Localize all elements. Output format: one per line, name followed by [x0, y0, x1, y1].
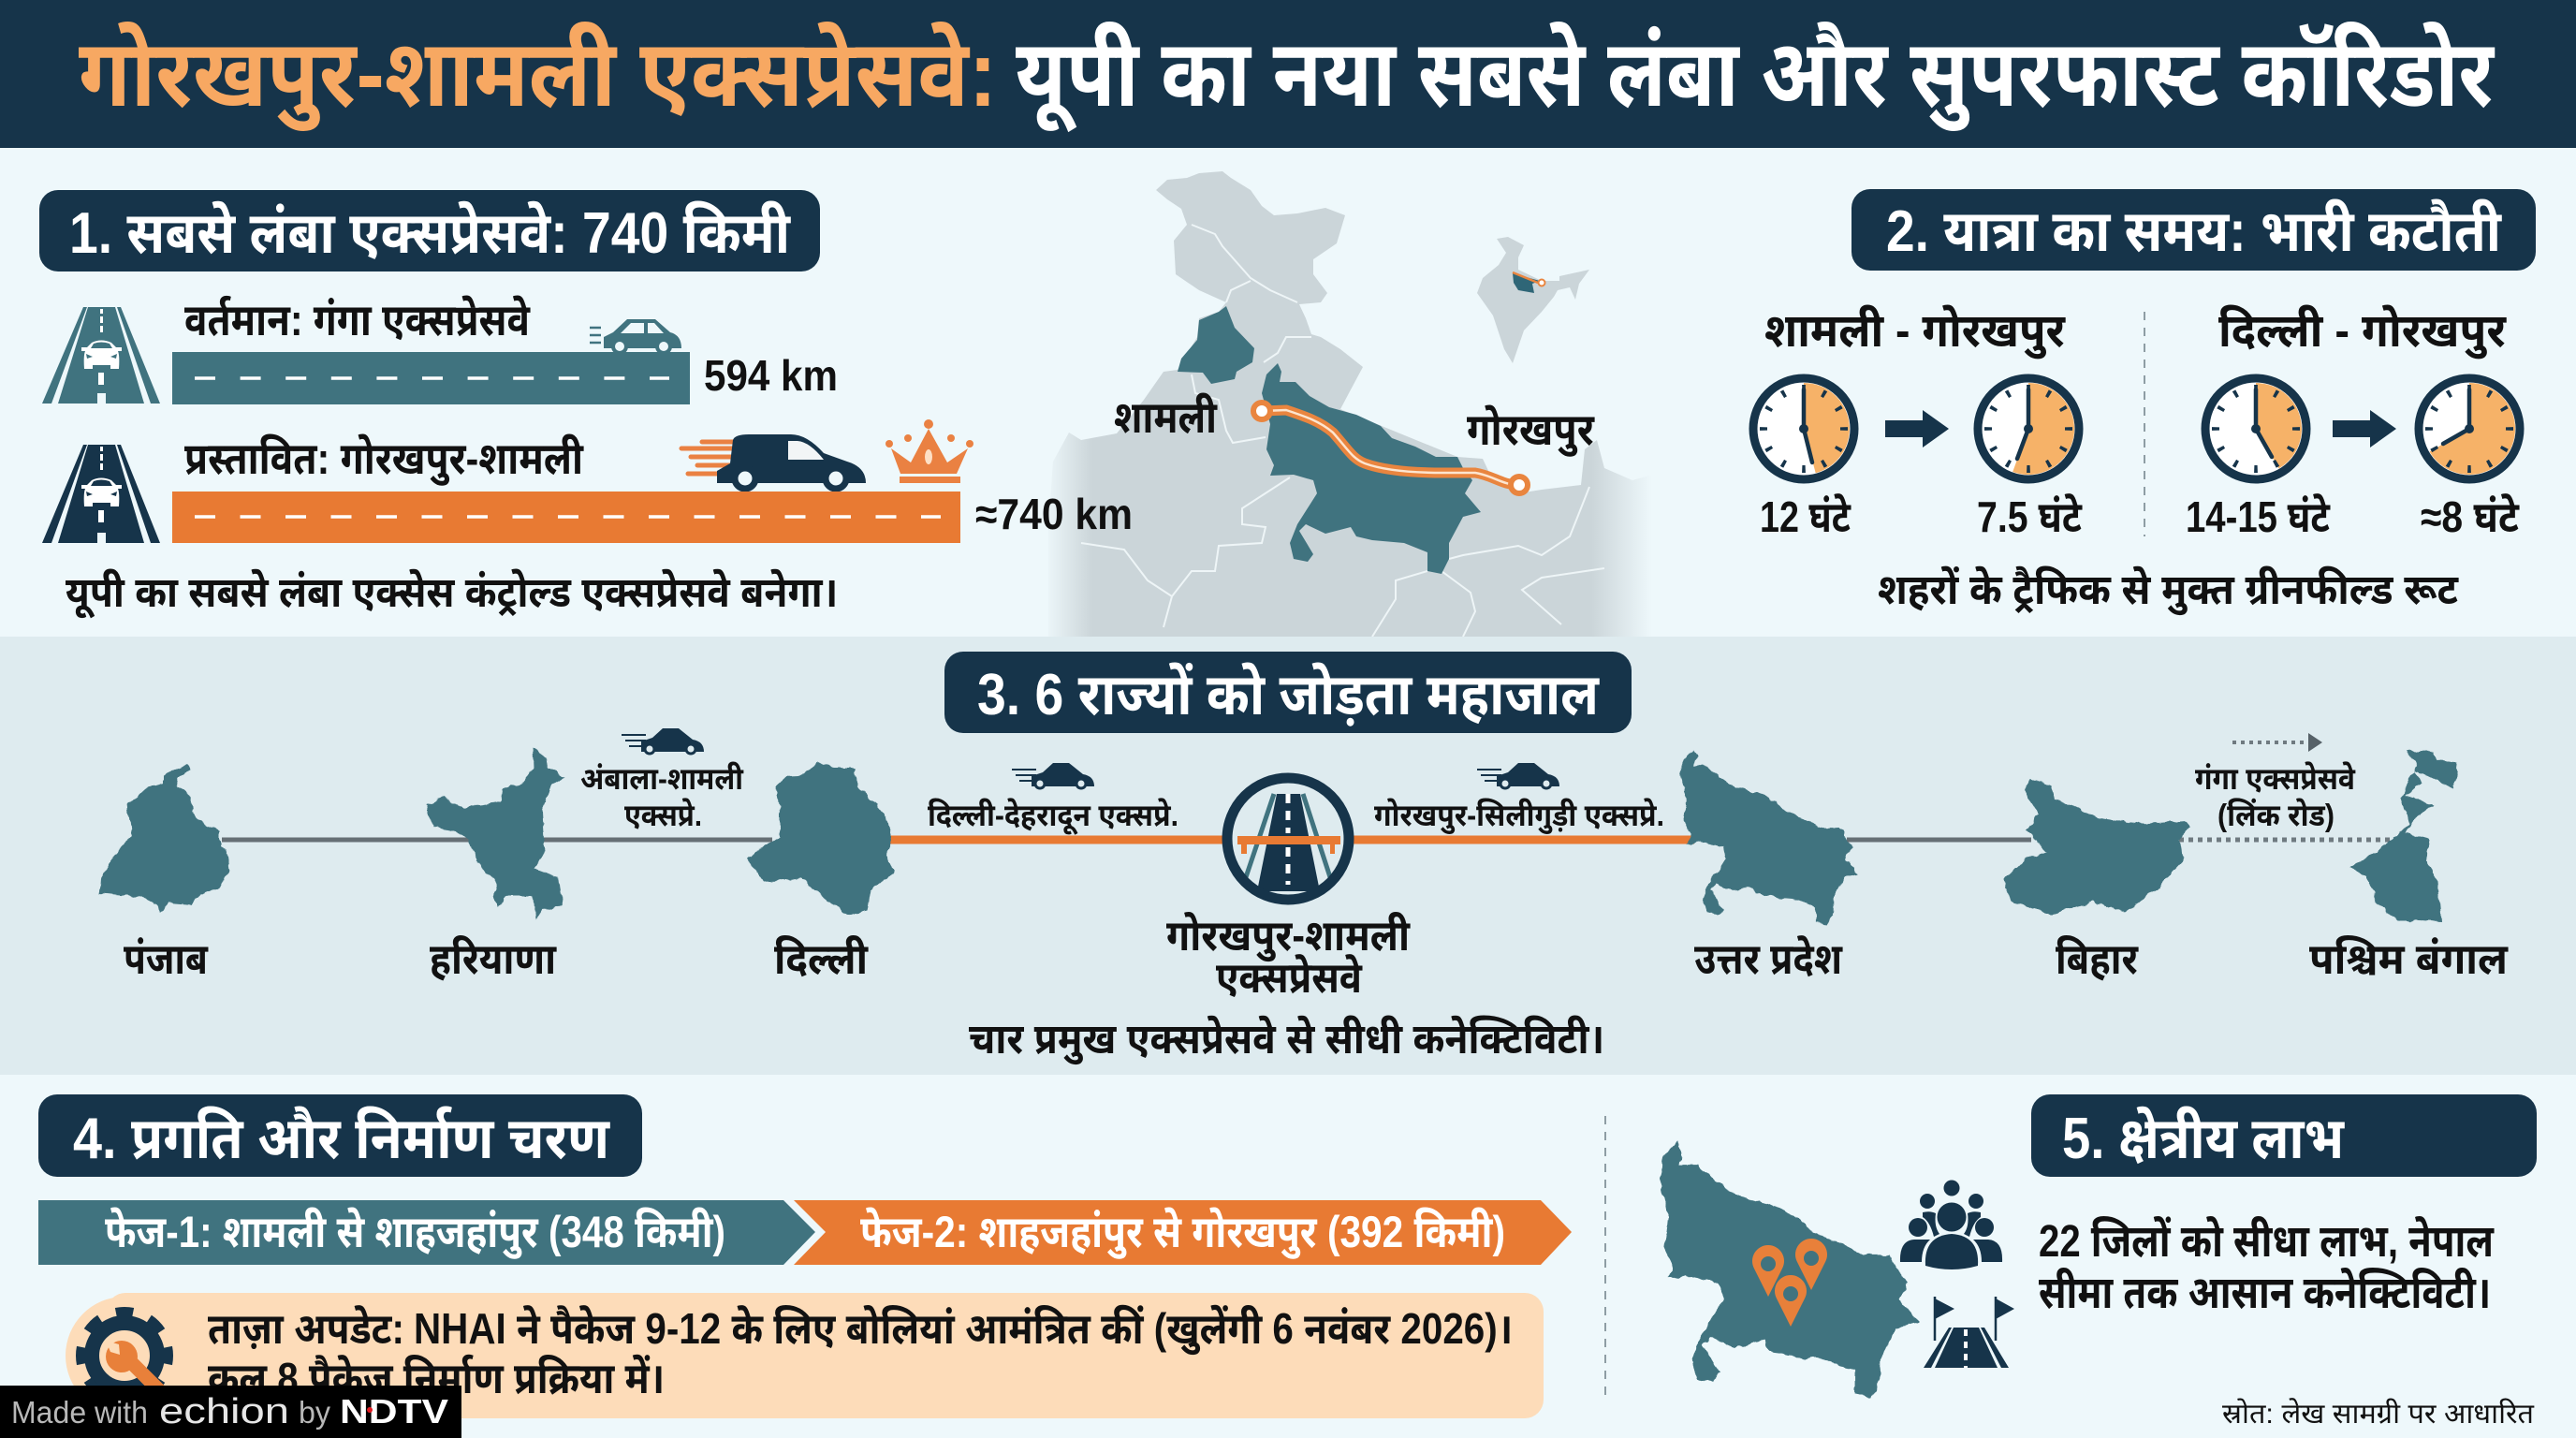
map: Punjab highlighted: [1178, 306, 1254, 384]
state: Bihar: [2004, 778, 2191, 915]
icon: road with flags: [1924, 1297, 2014, 1368]
source: स्रोत: लेख सामग्री पर आधारित: [2222, 1397, 2535, 1430]
state labels: बिहार: [2056, 934, 2139, 983]
state labels: उत्तर प्रदेश: [1694, 933, 1843, 983]
callout: latest update: NHAI ने पैकेज 9-12 के लिए बोलियां आमंत्रित कीं (खुलेंगी 6 नवंबर 2026)।: [414, 1303, 1513, 1355]
arrow: [1885, 410, 1949, 448]
badge: made with echion by NDTV: NDTV: [340, 1392, 448, 1431]
badge: made with echion by NDTV: echion: [159, 1392, 289, 1431]
route: Shamli to Gorakhpur: [1253, 403, 1528, 493]
state: Delhi: [747, 761, 894, 916]
benefit text: [2039, 1215, 2495, 1318]
value: 740 km: ≈740 km: [975, 490, 1133, 538]
map: India inset: [1477, 237, 1589, 363]
state: Haryana: [426, 748, 566, 919]
state labels: पंजाब: [124, 934, 209, 983]
expressway label: Ambala-Shamli: एक्सप्रे.: [624, 797, 702, 832]
time labels: 7.5 घंटे: [1977, 492, 2083, 541]
state: Uttar Pradesh: [1680, 750, 1859, 925]
expressway label: Ambala-Shamli: [580, 761, 744, 832]
panel 3: six-state network: [0, 637, 2576, 1075]
title: [79, 22, 2496, 133]
expressway label: Ganga link road: गंगा एक्सप्रेसवे: [2195, 760, 2356, 796]
state labels: पश्चिम बंगाल: [2309, 934, 2509, 983]
phase 2 arrow: फेज-2: शाहजहांपुर से गोरखपुर (392 किमी): [860, 1207, 1505, 1258]
callout: latest update: कुल 8 पैकेज निर्माण प्रक्रिया में।: [208, 1353, 665, 1404]
heading 3: 3. 6 राज्यों को जोड़ता महाजाल: [977, 662, 1600, 727]
bar: 740 km: [172, 492, 960, 543]
clock: 7.5 hours: [1978, 378, 2079, 479]
central label: एक्सप्रेसवे: [1216, 952, 1363, 1002]
panel 4: progress and phases: [38, 1094, 1572, 1418]
central label: [1166, 911, 1411, 1002]
title: गोरखपुर-शामली एक्सप्रेसवे:: [79, 22, 997, 131]
label: proposed: प्रस्तावित: गोरखपुर-शामली: [184, 433, 584, 485]
expressway label: Ambala-Shamli: अंबाला-शामली: [580, 761, 744, 796]
heading 1: 1. सबसे लंबा एक्सप्रेसवे: 740 किमी: [69, 199, 792, 266]
expressway label: Ganga link road: (लिंक रोड): [2217, 798, 2334, 832]
arrow: [2333, 410, 2396, 448]
route label: Delhi-Gorakhpur: दिल्ली - गोरखपुर: [2218, 304, 2507, 360]
icon: car: [622, 728, 704, 754]
clock: 14-15 hours: [2205, 378, 2306, 479]
note 2: शहरों के ट्रैफिक से मुक्त ग्रीनफील्ड रूट: [1878, 565, 2459, 615]
value: 594 km: 594 km: [704, 351, 838, 400]
icon: location pins: [1752, 1239, 1827, 1327]
heading 5: 5. क्षेत्रीय लाभ: [2062, 1105, 2345, 1171]
icon: central expressway badge: [1227, 778, 1349, 900]
panel 2: travel time: [1753, 189, 2536, 615]
panel 1: longest expressway: [39, 190, 1133, 619]
state labels: हरियाणा: [430, 934, 557, 983]
expressway label: Delhi-Dehradun: दिल्ली-देहरादून एक्सप्रे.: [928, 797, 1178, 835]
phase 1 arrow: फेज-1: शामली से शाहजहांपुर (348 किमी): [105, 1207, 725, 1258]
time labels: 12 घंटे: [1760, 492, 1852, 541]
arrow: dotted link: [2232, 733, 2322, 752]
panel 5: regional benefits: [1659, 1094, 2537, 1430]
icon: car: [1477, 763, 1559, 788]
icon: people: [1900, 1180, 2002, 1269]
map: Uttar Pradesh highlighted: [1262, 363, 1481, 574]
label: Gorakhpur: गोरखपुर: [1467, 404, 1595, 456]
bar: 594 km: [172, 352, 690, 404]
clock: 8 hours: [2419, 378, 2520, 479]
label: Shamli: शामली: [1114, 392, 1218, 442]
icon: car: [1012, 763, 1094, 788]
header band: [0, 0, 2576, 148]
state: Punjab: [100, 764, 230, 914]
heading 2: 2. यात्रा का समय: भारी कटौती: [1886, 198, 2503, 264]
time labels: [1760, 492, 2520, 541]
note 1: यूपी का सबसे लंबा एक्सेस कंट्रोल्ड एक्सप्रेसवे बनेगा।: [66, 568, 838, 619]
update text: ताज़ा अपडेट:: [208, 1303, 404, 1353]
benefit text: सीमा तक आसान कनेक्टिविटी।: [2039, 1267, 2491, 1318]
badge: made with echion by NDTV: Made with: [11, 1395, 148, 1430]
panel: central map: [1048, 171, 1652, 637]
icon: fast car: [681, 434, 866, 489]
central label: गोरखपुर-शामली: [1166, 911, 1411, 961]
phase 1 arrow: [38, 1200, 815, 1265]
time labels: ≈8 घंटे: [2421, 492, 2520, 541]
note 3: चार प्रमुख एक्सप्रेसवे से सीधी कनेक्टिविटी।: [969, 1015, 1604, 1064]
state labels: [124, 933, 2509, 983]
icon: gear and wrench: [80, 1312, 168, 1400]
state: West Bengal: [2349, 751, 2458, 922]
icon: road teal: [42, 307, 160, 404]
phase 2 arrow: [794, 1200, 1572, 1265]
state labels: दिल्ली: [774, 934, 869, 983]
expressway label: Gorakhpur-Siliguri: गोरखपुर-सिलीगुड़ी एक्सप्रे.: [1374, 797, 1664, 835]
expressway label: Ganga link road: [2195, 760, 2356, 832]
time labels: 14-15 घंटे: [2186, 492, 2331, 541]
benefit text: 22 जिलों को सीधा लाभ, नेपाल: [2039, 1215, 2495, 1267]
icon: road navy: [42, 445, 160, 543]
callout: latest update: [66, 1293, 1544, 1418]
route label: Shamli-Gorakhpur: शामली - गोरखपुर: [1764, 304, 2066, 360]
badge: made with echion by NDTV: [0, 1386, 461, 1438]
heading 5: [2031, 1094, 2537, 1177]
heading 4: 4. प्रगति और निर्माण चरण: [73, 1106, 610, 1171]
clock: 12 hours: [1753, 378, 1854, 479]
icon: small car: [590, 319, 681, 353]
icon: crown: [886, 419, 973, 483]
badge: made with echion by NDTV: by: [299, 1395, 330, 1430]
map: Uttar Pradesh: [1659, 1142, 1918, 1397]
label: current: वर्तमान: गंगा एक्सप्रेसवे: [184, 295, 531, 345]
connector lines: [222, 837, 2396, 843]
